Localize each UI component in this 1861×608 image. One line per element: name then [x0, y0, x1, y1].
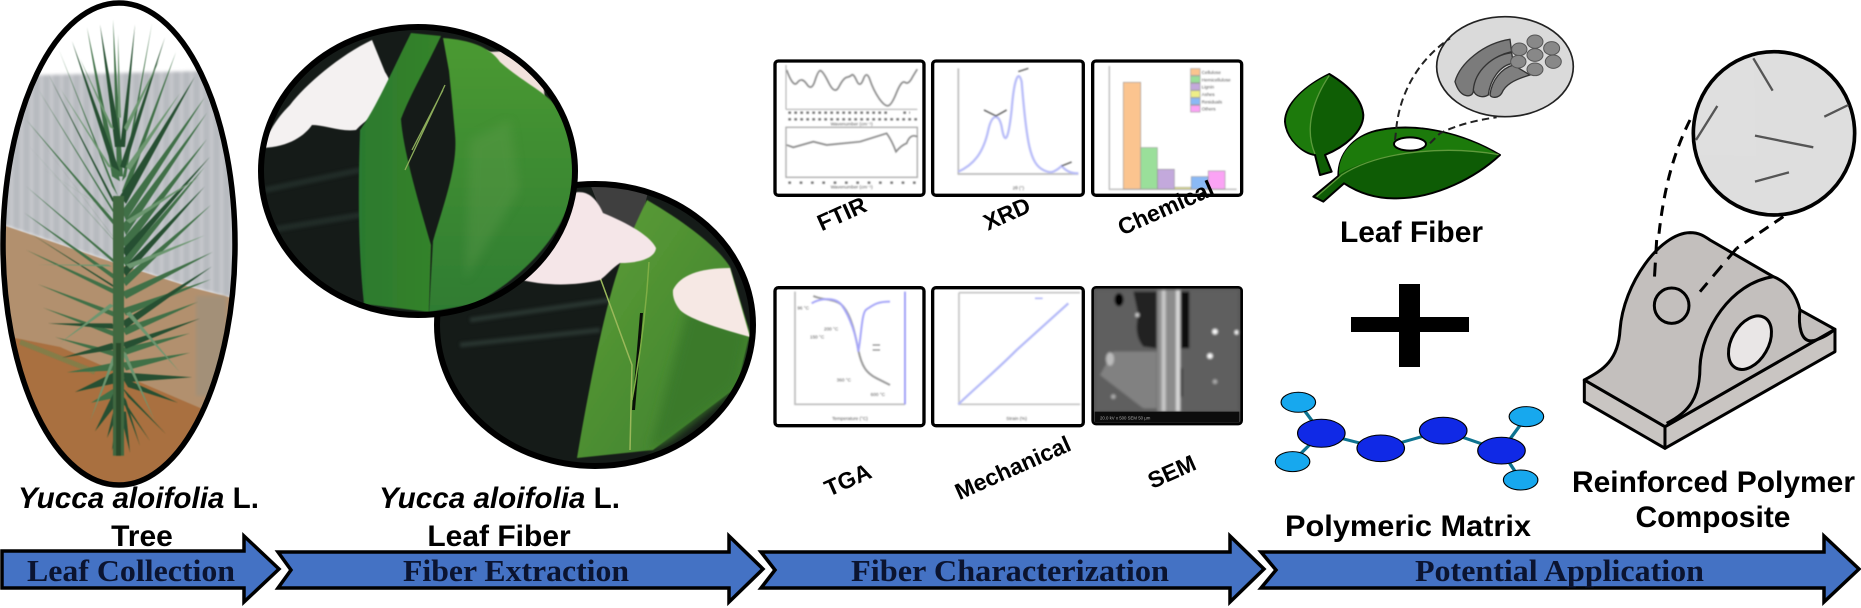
- arrow: leaf collection: Leaf Collection: [27, 553, 235, 588]
- panel: leaf fiber photo lower: [430, 180, 760, 470]
- glove: [262, 40, 393, 148]
- photo: SEM micrograph: [1093, 287, 1242, 424]
- chart: TGA: 360 °C: [837, 378, 852, 383]
- chart: XRD: [933, 61, 1083, 195]
- chart: FTIR: Wavenumber (cm⁻¹): [831, 185, 873, 190]
- dashed callout: [1394, 38, 1497, 151]
- chart: TGA: 150 °C: [810, 334, 825, 339]
- icon: green leaves with fiber inset: [1285, 17, 1573, 202]
- labels: characterization techniques: SEM: [1144, 450, 1200, 494]
- arrow: fiber extraction: Fiber Extraction: [403, 553, 629, 588]
- heading: leaf fiber caption: Leaf Fiber: [427, 520, 571, 553]
- arrow: potential application: [1261, 536, 1859, 602]
- icon: polymer molecule: [1275, 392, 1544, 490]
- chart: XRD: 2θ (°): [1013, 185, 1024, 190]
- heading: reinforced polymer composite: Composite: [1635, 501, 1791, 534]
- chart: TGA: 96 °C: [797, 305, 810, 310]
- icon: yucca leaves: [24, 20, 213, 456]
- chart: chemical composition: Hemicellulose: [1202, 77, 1231, 82]
- chart: TGA: Temperature (°C): [832, 416, 868, 421]
- panel: yucca tree photo: [6, 21, 232, 482]
- chart: TGA: 200 °C: [824, 327, 839, 332]
- photo: SEM micrograph: 20.0 kV x 500 SEM 50 µm: [1100, 416, 1151, 421]
- labels: characterization techniques: Chemical: [1114, 175, 1218, 240]
- chart: chemical composition: Others: [1202, 107, 1216, 112]
- chart: mechanical: Strain (%): [1006, 416, 1027, 421]
- arrow: fiber characterization: [761, 536, 1264, 602]
- heading: tree caption: Yucca aloifolia L.: [18, 482, 259, 515]
- heading: leaf fiber caption: Yucca aloifolia L.: [379, 482, 620, 515]
- labels: characterization techniques: FTIR: [813, 191, 871, 236]
- labels: characterization techniques: [813, 175, 1218, 505]
- fiber inset: [1437, 17, 1573, 117]
- chart: mechanical: [933, 288, 1083, 426]
- icon: composite magnified circle: [1658, 52, 1855, 248]
- heading: leaf fiber caption: [379, 482, 620, 553]
- leaf blade: [577, 200, 750, 458]
- front leaf: [1313, 128, 1500, 202]
- chart: TGA: 600 °C: [871, 392, 886, 397]
- chart: FTIR: [775, 61, 924, 195]
- heading: leaf fiber: Leaf Fiber: [1340, 216, 1483, 249]
- panel: characterization charts: [775, 61, 1242, 426]
- ellipse frame of tree: [3, 3, 235, 485]
- labels: characterization techniques: Mechanical: [951, 431, 1075, 505]
- arrow: fiber characterization: Fiber Characterization: [851, 553, 1169, 588]
- gloves: [518, 192, 656, 284]
- leaf right: [429, 38, 573, 312]
- heading: tree caption: [18, 482, 259, 553]
- chart: FTIR: Wavenumber (cm⁻¹): [831, 121, 873, 126]
- arrow: potential application: Potential Application: [1415, 553, 1704, 588]
- heading: reinforced polymer composite: [1572, 466, 1855, 534]
- chart: chemical composition: [1093, 61, 1242, 195]
- arrow: leaf collection: [2, 536, 279, 602]
- heading: reinforced polymer composite: Reinforced Polymer: [1572, 466, 1855, 499]
- heading: tree caption: Tree: [111, 520, 173, 553]
- arrow: fiber extraction: [278, 536, 763, 602]
- panel: leaf fiber photo upper: [255, 25, 580, 320]
- back leaf: [1285, 74, 1363, 175]
- chart: chemical composition: Lignin: [1202, 85, 1214, 90]
- chart: chemical composition: Ashes: [1202, 92, 1215, 97]
- chart: TGA: [775, 288, 924, 426]
- heading: polymeric matrix: Polymeric Matrix: [1285, 510, 1531, 543]
- chart: chemical composition: Residuals: [1202, 99, 1223, 104]
- icon: plus: [1351, 284, 1469, 367]
- labels: characterization techniques: XRD: [979, 192, 1034, 235]
- icon: composite machine part: [1584, 233, 1835, 448]
- chart: chemical composition: Cellulose: [1202, 70, 1221, 75]
- labels: characterization techniques: TGA: [820, 458, 875, 501]
- leaf left: [359, 33, 441, 312]
